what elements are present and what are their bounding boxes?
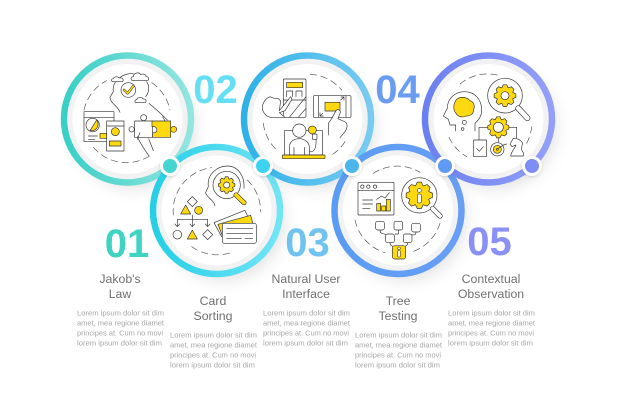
text block: Jakob's Law: Lorem ipsum dolor sit dim — [77, 308, 164, 318]
heading: Card Sorting: Card — [200, 294, 226, 308]
number 05: 05 — [467, 220, 512, 264]
icon: head, gear, shapes, cards — [173, 166, 261, 255]
text block: Tree Testing: principes at. Cum no movi — [355, 350, 441, 360]
icon: head, clouds, puzzle — [84, 73, 177, 163]
heading: Card Sorting: Sorting — [194, 309, 233, 323]
connector dot 5 — [522, 156, 542, 176]
heading: Natural User Interface: Interface — [282, 287, 330, 301]
connector dot 3 — [342, 156, 362, 176]
heading: Tree Testing: Testing — [379, 309, 418, 323]
heading: Contextual Observation: Observation — [458, 287, 524, 301]
connector dot 4 — [435, 156, 455, 176]
panel: step 05 Contextual Observation circle — [425, 56, 552, 182]
text block: Contextual Observation: amet, mea regione diamet — [448, 318, 535, 328]
number 01: 01 — [105, 222, 149, 266]
text block: Tree Testing: lorem ipsum dolor sit dim — [355, 360, 440, 370]
text block: Card Sorting: principes at. Cum no movi — [170, 350, 256, 360]
text block: Tree Testing: amet, mea regione diamet — [355, 340, 442, 350]
heading: Natural User Interface: Natural User — [271, 272, 341, 286]
heading: Contextual Observation: Contextual — [462, 272, 520, 286]
icon: touch panels and user at laptop — [262, 74, 351, 159]
text block: Natural User Interface: principes at. Cum no movi — [263, 328, 349, 338]
connector dot 1 — [160, 156, 180, 176]
icon: chart window, magnifier, tree — [355, 166, 440, 259]
heading: Tree Testing: Tree — [386, 294, 411, 308]
heading: Jakob's Law: Jakob's — [99, 272, 141, 286]
panel: step 02 Card Sorting circle — [153, 147, 280, 274]
text block: Jakob's Law: principes at. Cum no movi — [77, 328, 163, 338]
connector dot 2 — [253, 156, 273, 176]
icon: head, magnifier, gears, target, chess — [443, 74, 532, 157]
number 02: 02 — [193, 68, 238, 112]
text block: Contextual Observation: Lorem ipsum dolor sit dim — [448, 308, 535, 318]
text block: Natural User Interface: amet, mea regione diamet — [263, 318, 350, 328]
panel: step 03 Natural User Interface circle — [244, 56, 371, 182]
text block: Contextual Observation: principes at. Cum no movi — [448, 328, 534, 338]
text block: Contextual Observation: lorem ipsum dolor sit dim — [448, 338, 533, 348]
number 04: 04 — [375, 68, 420, 112]
heading: Jakob's Law: Law — [109, 287, 131, 301]
text block: Card Sorting: Lorem ipsum dolor sit dim — [170, 330, 257, 340]
number 03: 03 — [285, 221, 330, 265]
text block: Card Sorting: lorem ipsum dolor sit dim — [170, 360, 255, 370]
text block: Jakob's Law: amet, mea regione diamet — [77, 318, 164, 328]
panel: step 01 Jakob's Law circle — [64, 56, 191, 182]
text block: Jakob's Law: lorem ipsum dolor sit dim — [77, 338, 162, 348]
text block: Natural User Interface: Lorem ipsum dolor sit dim — [263, 308, 350, 318]
text block: Card Sorting: amet, mea regione diamet — [170, 340, 257, 350]
panel: step 04 Tree Testing circle — [334, 147, 462, 274]
text block: Tree Testing: Lorem ipsum dolor sit dim — [355, 330, 442, 340]
text block: Natural User Interface: lorem ipsum dolor sit dim — [263, 338, 348, 348]
